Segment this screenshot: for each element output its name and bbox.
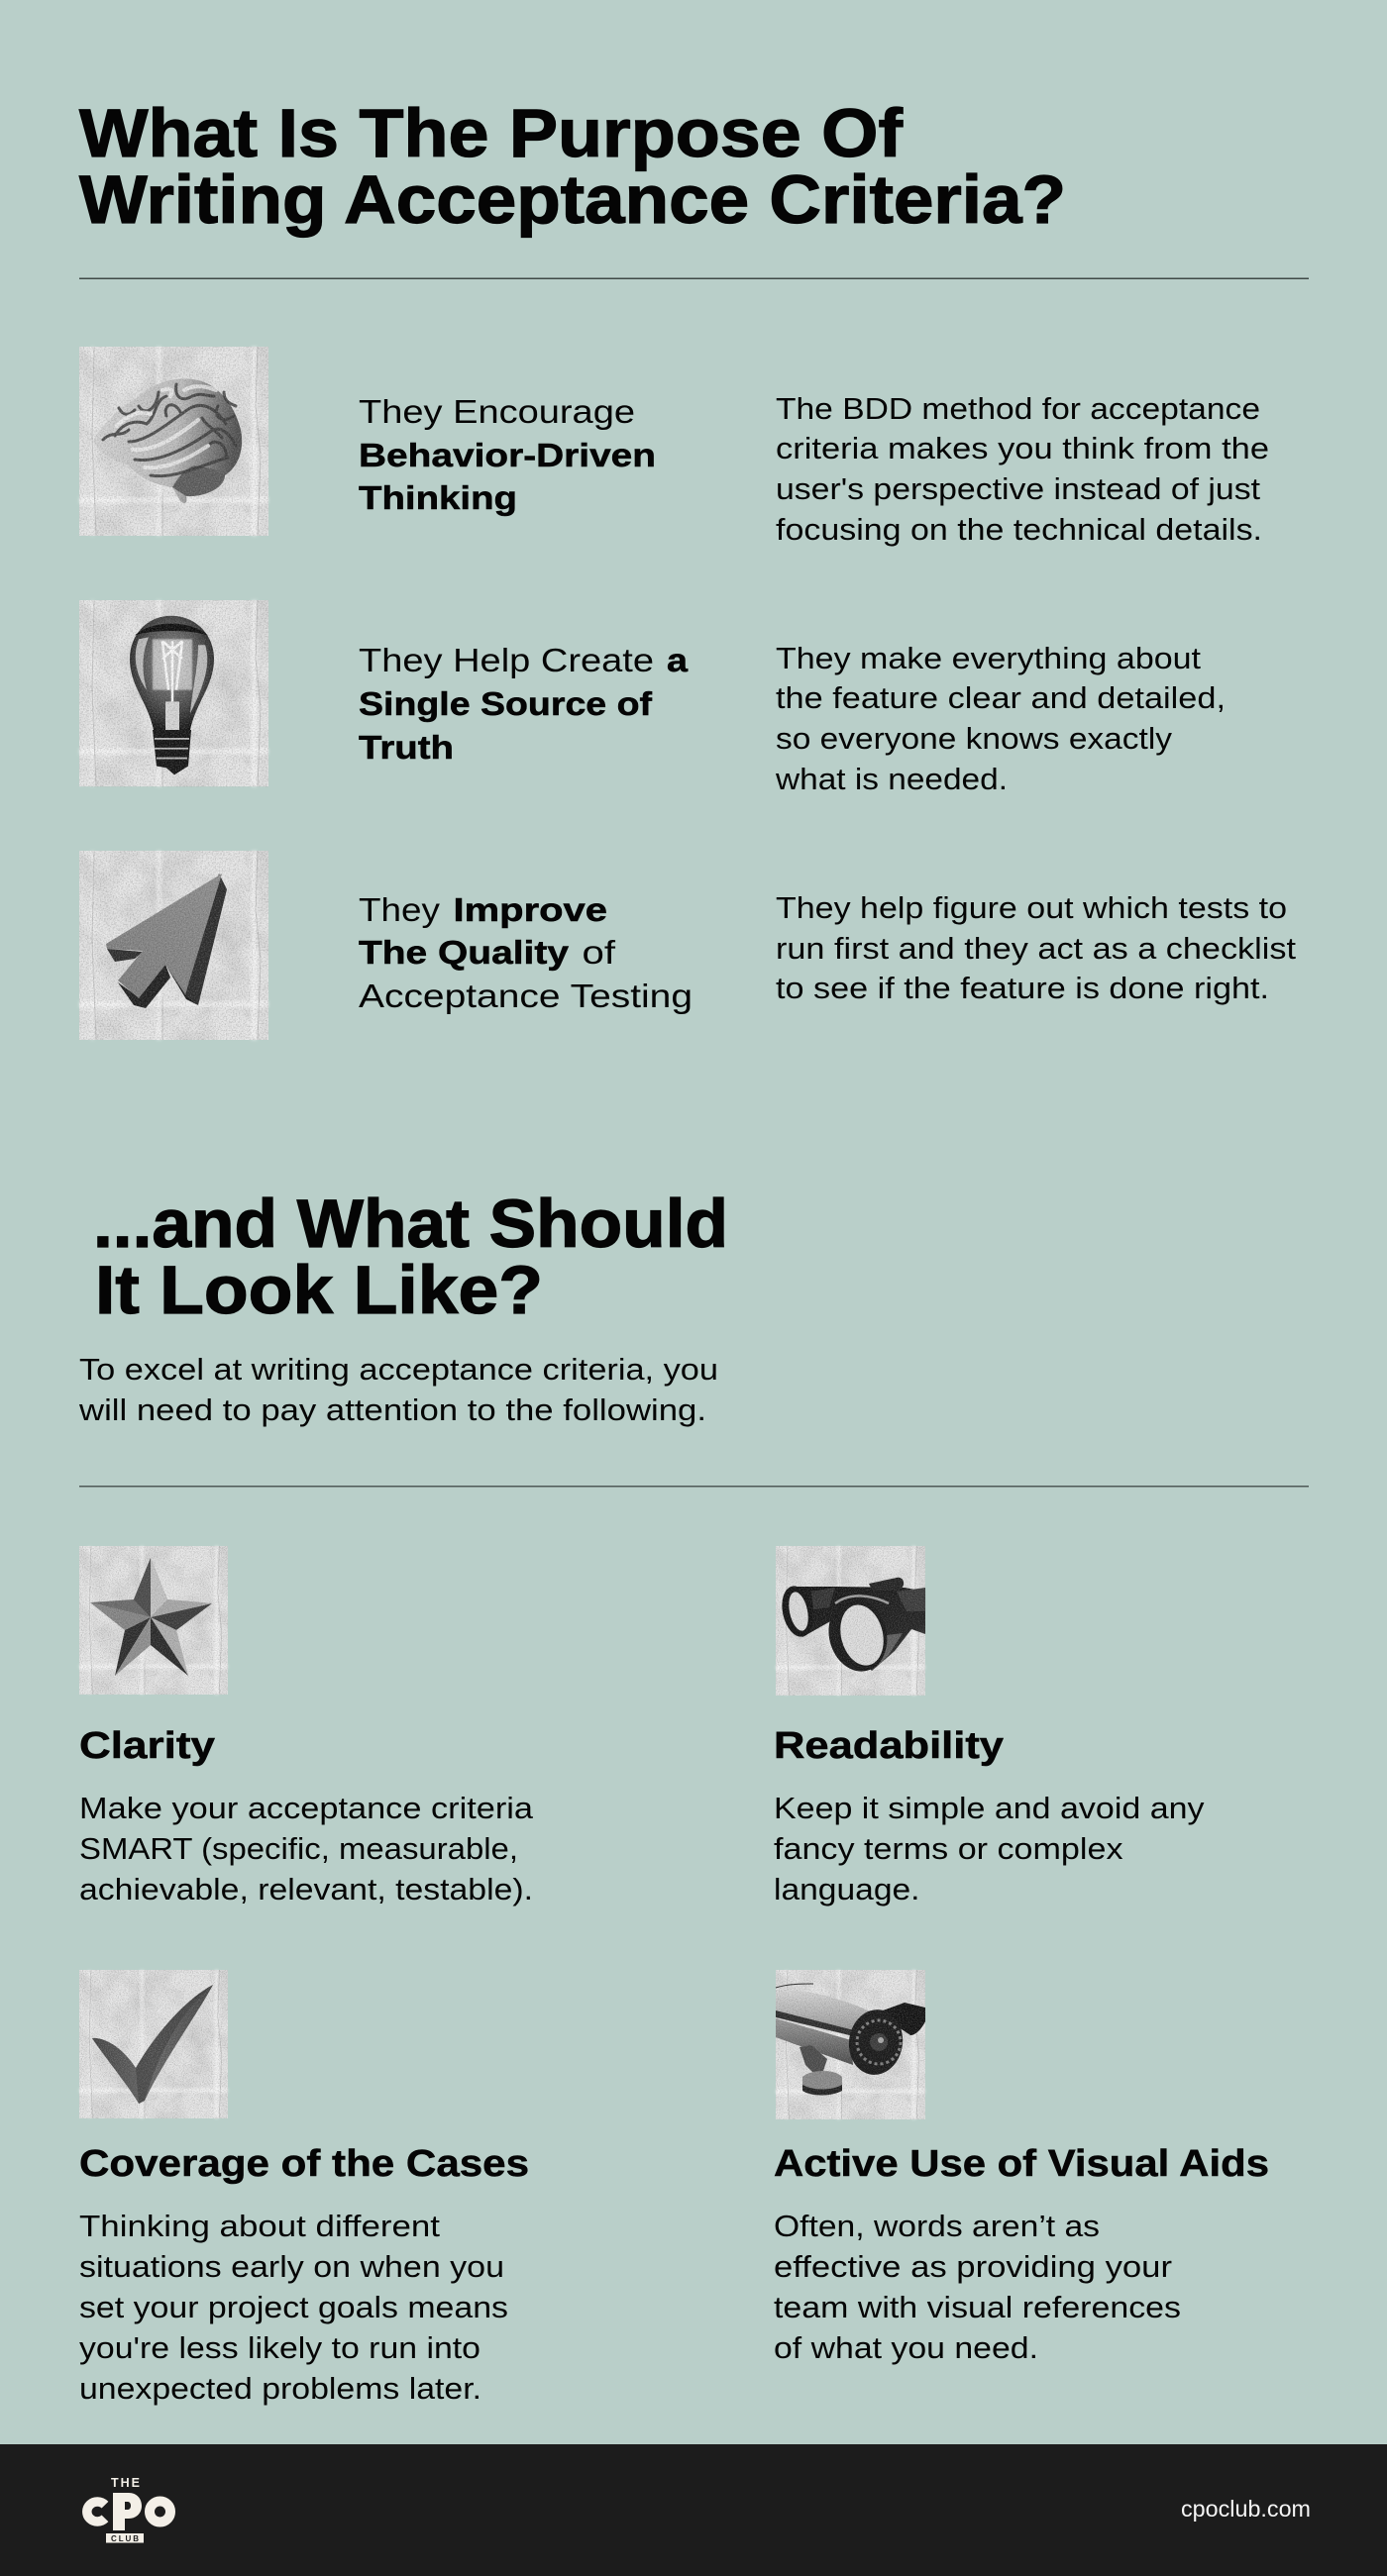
logo: the cpo club — [87, 2476, 170, 2543]
text: clarity of the feature description: the feature clear and detailed, — [776, 680, 1226, 715]
text: website: cpoclub.com — [1181, 2496, 1311, 2522]
heading: improve the quality: The Quality — [359, 934, 570, 971]
text: clarity description: SMART (specific, measurable, — [79, 1831, 518, 1866]
text: visual aids description: team with visual references — [774, 2290, 1181, 2324]
text: readability description: language. — [774, 1872, 919, 1906]
text: intro paragraph: To excel at writing acceptance criteria, you — [79, 1352, 718, 1387]
heading: improve the quality: They — [359, 891, 441, 928]
icon: security camera — [776, 1970, 925, 2119]
heading: single source of truth: They Help Create — [359, 642, 654, 678]
text: coverage description: situations early on when you — [79, 2249, 504, 2284]
text: coverage description: set your project goals means — [79, 2290, 508, 2324]
text: visual aids description: Often, words aren’t as — [774, 2209, 1100, 2243]
text: intro paragraph: will need to pay attention to the following. — [78, 1392, 706, 1427]
heading: single source of truth — [359, 642, 689, 766]
text: clarity description: Make your acceptance criteria — [79, 1791, 534, 1825]
panel: active use of visual aids — [774, 1970, 1269, 2365]
text: readability description: fancy terms or complex — [774, 1831, 1123, 1866]
text: tests checklist description: run first and they act as a checklist — [776, 931, 1296, 966]
text: visual aids description — [774, 2209, 1181, 2365]
title: What Is The Purpose Of — [79, 95, 904, 171]
text: tests checklist description: to see if the feature is done right. — [776, 971, 1269, 1005]
text: clarity of the feature description: They make everything about — [776, 641, 1201, 675]
text: BDD description: The BDD method for acceptance — [776, 391, 1260, 426]
footer — [0, 2444, 1387, 2576]
text: clarity of the feature description: what is needed. — [775, 762, 1008, 796]
panel: purpose row 2 — [79, 600, 1226, 796]
heading: and what should it look like — [93, 1185, 728, 1328]
text: BDD description — [776, 391, 1269, 547]
text: coverage description: Thinking about different — [79, 2209, 440, 2243]
heading: single source of truth: Truth — [359, 729, 454, 766]
icon: check mark — [79, 1970, 228, 2118]
heading: behavior-driven thinking: Thinking — [359, 479, 517, 516]
title: Writing Acceptance Criteria? — [79, 161, 1066, 238]
heading: behavior-driven thinking: Behavior-Driven — [359, 437, 656, 473]
text: BDD description: focusing on the technical details. — [776, 512, 1262, 547]
text: coverage description: unexpected problems later. — [79, 2371, 481, 2406]
text: tests checklist description: They help figure out which tests to — [776, 890, 1287, 925]
heading: improve the quality: Improve — [454, 891, 607, 928]
panel: clarity — [79, 1546, 534, 1906]
heading: active use of visual aids: Active Use of Visual Aids — [774, 2143, 1269, 2185]
icon: light bulb — [79, 600, 268, 786]
heading: and what should it look like: ...and What Should — [93, 1185, 728, 1262]
text: readability description — [774, 1791, 1205, 1906]
text: intro paragraph — [78, 1352, 718, 1427]
text: visual aids description: of what you need. — [774, 2330, 1038, 2365]
icon: cursor arrow — [79, 851, 268, 1040]
icon: brain — [79, 347, 268, 536]
text: clarity description: achievable, relevant, testable). — [79, 1872, 533, 1906]
heading: clarity: Clarity — [79, 1725, 215, 1767]
icon: star — [79, 1546, 228, 1695]
heading: improve the quality — [359, 891, 693, 1014]
text: coverage description: you're less likely to run into — [79, 2330, 480, 2365]
panel: purpose row 3 — [79, 851, 1296, 1040]
panel: purpose row 1 — [79, 347, 1269, 547]
text: clarity of the feature description — [775, 641, 1226, 796]
heading: behavior-driven thinking: They Encourage — [359, 393, 635, 430]
heading: single source of truth: a — [667, 642, 689, 678]
text: coverage description — [79, 2209, 508, 2406]
text: BDD description: user's perspective instead of just — [776, 471, 1260, 506]
text: clarity description — [79, 1791, 534, 1906]
heading: coverage of the cases: Coverage of the Cases — [79, 2143, 529, 2185]
panel: coverage of the cases — [79, 1970, 529, 2406]
panel: readability — [774, 1546, 1205, 1906]
text: tests checklist description — [776, 890, 1296, 1005]
icon: binoculars — [776, 1546, 925, 1696]
heading: improve the quality: of — [583, 934, 616, 971]
logo: the cpo club: THE — [111, 2476, 140, 2490]
heading: and what should it look like: It Look Like? — [95, 1252, 543, 1328]
text: clarity of the feature description: so everyone knows exactly — [776, 721, 1173, 756]
text: visual aids description: effective as providing your — [774, 2249, 1172, 2284]
title — [79, 95, 1066, 238]
heading: single source of truth: Single Source of — [359, 685, 653, 722]
text: BDD description: criteria makes you think from the — [776, 431, 1269, 465]
text: readability description: Keep it simple and avoid any — [774, 1791, 1205, 1825]
heading: readability: Readability — [774, 1725, 1004, 1767]
heading: improve the quality: Acceptance Testing — [359, 978, 693, 1014]
logo: the cpo club: CLUB — [111, 2534, 139, 2543]
heading: behavior-driven thinking — [359, 393, 656, 516]
